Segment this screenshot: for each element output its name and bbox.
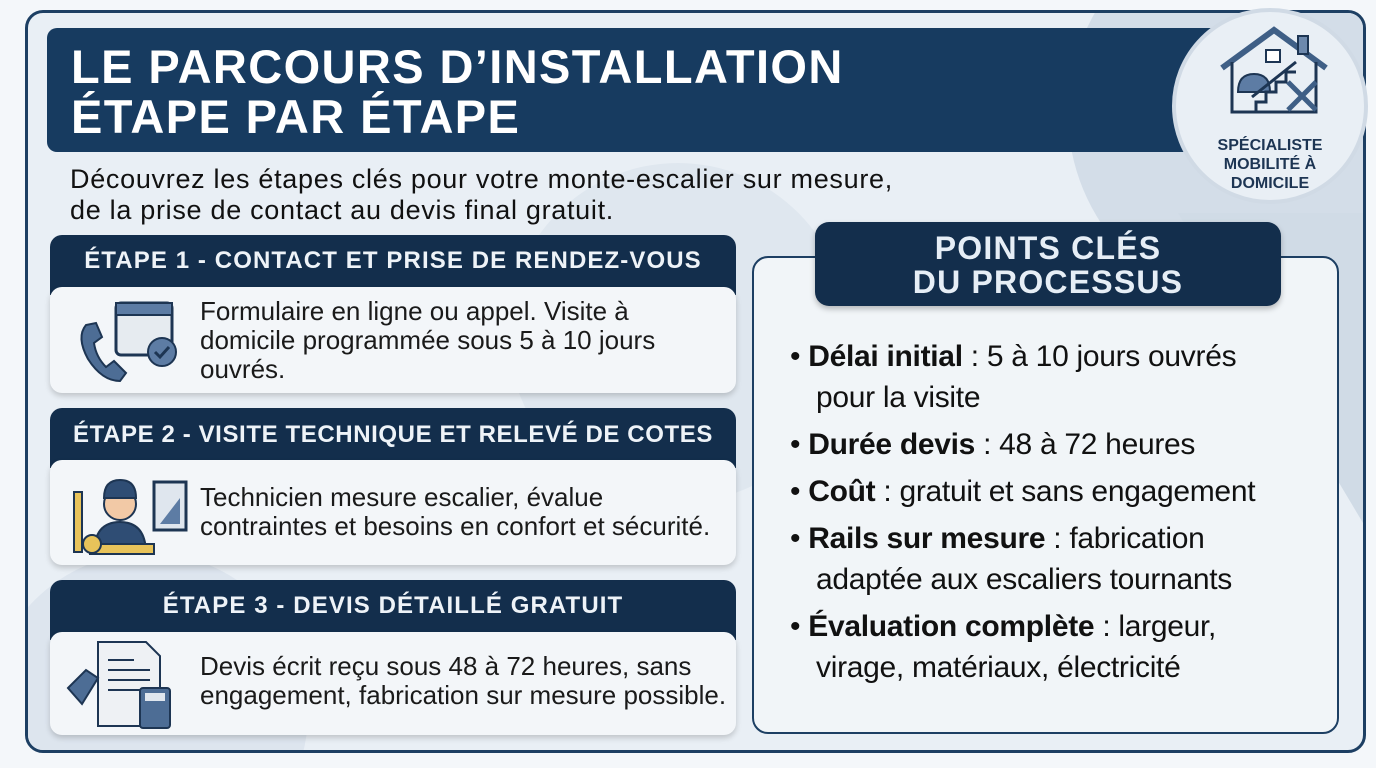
step 3	[48, 580, 738, 740]
step 3 text: engagement, fabrication sur mesure possible.	[200, 680, 726, 710]
bullet list: • Rails sur mesure : fabrication	[790, 522, 1204, 555]
step 3 text: Devis écrit reçu sous 48 à 72 heures, sans	[200, 651, 691, 681]
step 2	[48, 408, 738, 570]
step 1 text	[200, 296, 655, 384]
step 3 text	[200, 651, 726, 710]
step 3 header: ÉTAPE 3 - DEVIS DÉTAILLÉ GRATUIT	[163, 592, 623, 619]
panel header: points clés du processus: DU PROCESSUS	[913, 264, 1183, 300]
step 1 text: domicile programmée sous 5 à 10 jours	[200, 325, 655, 355]
subtitle: de la prise de contact au devis final gratuit.	[70, 195, 614, 225]
badge: spécialiste mobilité: DOMICILE	[1231, 175, 1309, 192]
title banner: ÉTAPE PAR ÉTAPE	[71, 90, 520, 143]
bullet list: • Durée devis : 48 à 72 heures	[790, 428, 1195, 461]
badge: spécialiste mobilité: SPÉCIALISTE	[1218, 137, 1322, 154]
step 3 header	[50, 580, 736, 640]
step 2 text	[200, 482, 710, 541]
step 2 header	[50, 408, 736, 468]
step 2 body	[50, 460, 736, 565]
step 2 text: contraintes et besoins en confort et sécurité.	[200, 511, 710, 541]
bullet list: • Évaluation complète : largeur,	[790, 610, 1216, 643]
step 1 header: ÉTAPE 1 - CONTACT ET PRISE DE RENDEZ-VOUS	[84, 247, 702, 274]
badge: spécialiste mobilité	[1172, 8, 1368, 204]
icon: technician	[73, 479, 188, 555]
icon: quote document	[66, 641, 171, 729]
panel header: points clés du processus: POINTS CLÉS	[935, 230, 1161, 266]
step 2 text: Technicien mesure escalier, évalue	[200, 482, 603, 512]
panel header: points clés du processus	[815, 222, 1281, 306]
bullet list: • Délai initial : 5 à 10 jours ouvrés	[790, 340, 1236, 373]
panel: points clés	[752, 256, 1339, 734]
bullet list: • Coût : gratuit et sans engagement	[790, 475, 1255, 508]
step 1 header	[50, 235, 736, 295]
subtitle	[70, 164, 893, 225]
bullet list	[790, 340, 1256, 684]
step 2 header: ÉTAPE 2 - VISITE TECHNIQUE ET RELEVÉ DE COTES	[73, 421, 713, 448]
step 1 text: Formulaire en ligne ou appel. Visite à	[200, 296, 629, 326]
icon: phone calendar	[80, 302, 177, 382]
step 1 text: ouvrés.	[200, 354, 285, 384]
subtitle: Découvrez les étapes clés pour votre monte-escalier sur mesure,	[70, 164, 893, 194]
bullet list: pour la visite	[816, 381, 980, 414]
step 1	[48, 235, 738, 398]
bullet list: virage, matériaux, électricité	[816, 651, 1180, 684]
step 3 body	[50, 632, 736, 735]
bullet list: adaptée aux escaliers tournants	[816, 563, 1232, 596]
title banner	[47, 28, 1217, 152]
step 1 body	[50, 287, 736, 393]
badge: spécialiste mobilité: MOBILITÉ À	[1224, 156, 1316, 173]
title banner: LE PARCOURS D’INSTALLATION	[71, 40, 844, 93]
